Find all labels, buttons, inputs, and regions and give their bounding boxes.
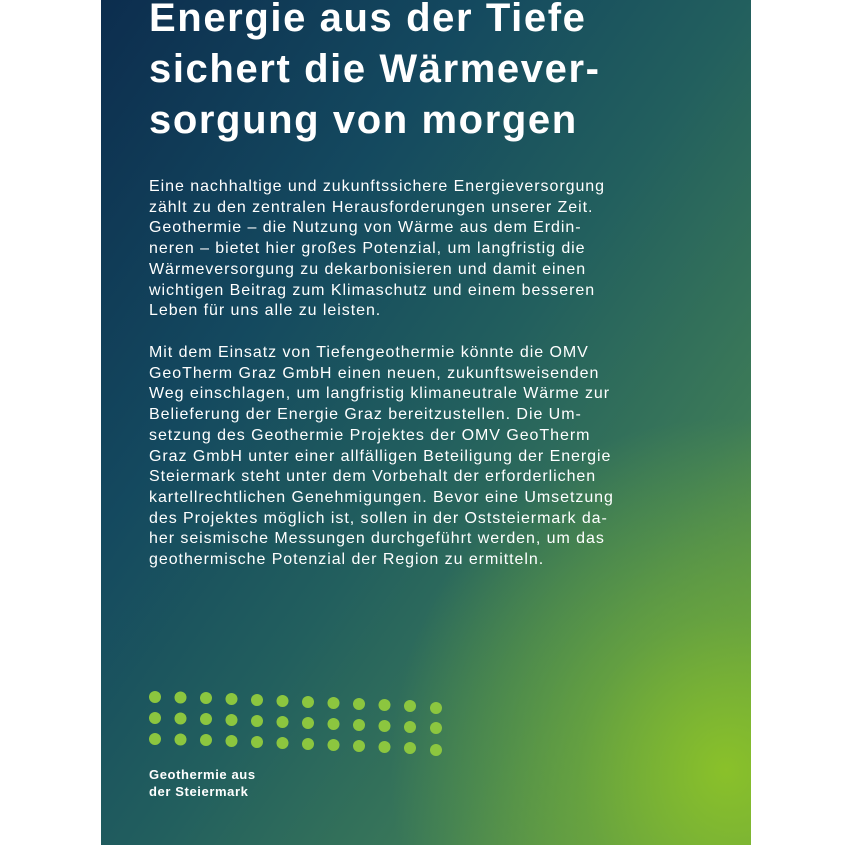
- text block: paragraph 1: zählt zu den zentralen Herausforderungen unserer Zeit.: [149, 199, 593, 216]
- text block: paragraph 1: Geothermie – die Nutzung von Wärme aus dem Erdin-: [149, 219, 582, 236]
- caption: [149, 767, 256, 799]
- text block: paragraph 2: geothermische Potenzial der Region zu ermitteln.: [149, 551, 544, 568]
- text block: paragraph 2: des Projektes möglich ist, sollen in der Oststeiermark da-: [149, 510, 608, 527]
- text block: paragraph 2: [149, 344, 614, 568]
- text block: paragraph 2: Steiermark steht unter dem Vorbehalt der erforderlichen: [149, 468, 596, 485]
- title: sichert die Wärmever-: [149, 47, 601, 91]
- title: [149, 0, 601, 142]
- text block: paragraph 1: wichtigen Beitrag zum Klimaschutz und einem besseren: [149, 282, 595, 299]
- text block: paragraph 1: [149, 178, 605, 319]
- dot grid: [149, 691, 442, 756]
- panel: gradient background: [101, 0, 751, 845]
- text block: paragraph 1: Wärmeversorgung zu dekarbonisieren und damit einen: [149, 261, 586, 278]
- text block: paragraph 2: GeoTherm Graz GmbH einen neuen, zukunftsweisenden: [149, 365, 599, 382]
- text block: paragraph 1: neren – bietet hier großes Potenzial, um langfristig die: [149, 240, 586, 257]
- text block: paragraph 2: setzung des Geothermie Projektes der OMV GeoTherm: [149, 427, 590, 444]
- text block: paragraph 1: Eine nachhaltige und zukunftssichere Energieversorgung: [149, 178, 605, 195]
- caption: Geothermie aus: [149, 767, 256, 782]
- text block: paragraph 2: Graz GmbH unter einer allfälligen Beteiligung der Energie: [149, 448, 611, 465]
- text block: paragraph 2: her seismische Messungen durchgeführt werden, um das: [149, 530, 605, 547]
- caption: der Steiermark: [149, 784, 248, 799]
- text block: paragraph 2: Weg einschlagen, um langfristig klimaneutrale Wärme zur: [149, 385, 610, 402]
- text block: paragraph 2: Mit dem Einsatz von Tiefengeothermie könnte die OMV: [149, 344, 589, 361]
- text block: paragraph 2: Belieferung der Energie Graz bereitzustellen. Die Um-: [149, 406, 582, 423]
- title: sorgung von morgen: [149, 98, 578, 142]
- text block: paragraph 2: kartellrechtlichen Genehmigungen. Bevor eine Umsetzung: [149, 489, 614, 506]
- text block: paragraph 1: Leben für uns alle zu leisten.: [149, 302, 381, 319]
